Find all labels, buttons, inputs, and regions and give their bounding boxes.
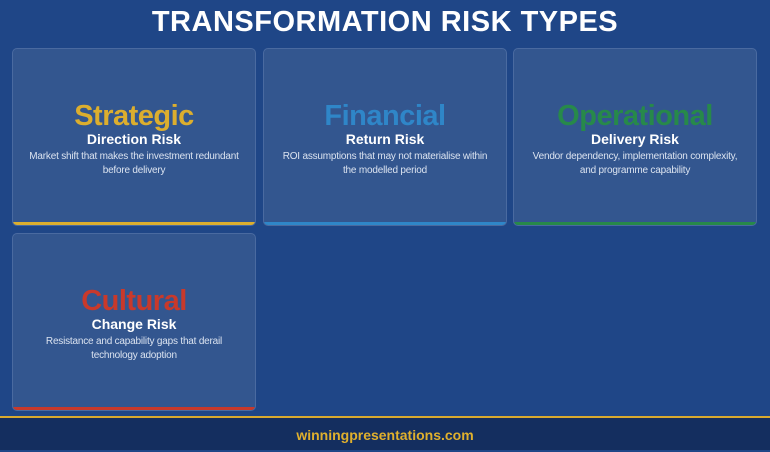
footer: winningpresentations.com — [296, 427, 474, 443]
text: cultural description: Resistance and capability gaps that derail — [46, 336, 222, 347]
panel: financial — [263, 48, 507, 226]
subtitle: return risk: Return Risk — [346, 131, 424, 147]
text: cultural description: technology adoption — [91, 350, 177, 361]
subtitle: direction risk: Direction Risk — [87, 131, 181, 147]
heading: strategic: Strategic — [74, 100, 194, 132]
subtitle: delivery risk: Delivery Risk — [591, 131, 679, 147]
panel: cultural — [12, 233, 256, 411]
text: operational description: Vendor dependency, implementation complexity, — [533, 151, 737, 162]
heading: operational: Operational — [557, 100, 713, 132]
panel: operational — [513, 48, 757, 226]
text: operational description: and programme capability — [580, 165, 690, 176]
subtitle: change risk: Change Risk — [92, 316, 176, 332]
text: strategic description — [29, 151, 239, 176]
text: cultural description — [46, 336, 222, 361]
heading: financial: Financial — [324, 100, 446, 132]
text: financial description — [283, 151, 487, 176]
footer — [0, 418, 770, 450]
heading: cultural: Cultural — [81, 285, 187, 317]
title: TRANSFORMATION RISK TYPES — [152, 6, 618, 38]
text: strategic description: before delivery — [103, 165, 165, 176]
text: strategic description: Market shift that makes the investment redundant — [29, 151, 239, 162]
text: financial description: ROI assumptions that may not materialise within — [283, 151, 487, 162]
text: operational description — [532, 151, 737, 176]
text: financial description: the modelled period — [343, 165, 427, 176]
panel: strategic — [12, 48, 256, 226]
